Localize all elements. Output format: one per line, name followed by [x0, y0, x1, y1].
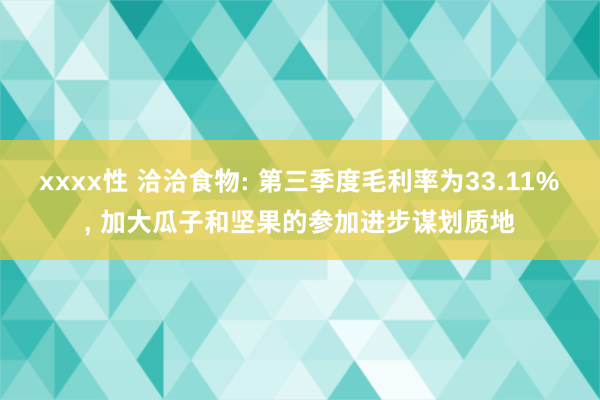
title line 1: xxxx性 洽洽食物: 第三季度毛利率为33.11% [39, 166, 561, 196]
title line 2: , 加大瓜子和坚果的参加进步谋划质地 [84, 207, 516, 237]
translucent yellow title band [0, 140, 600, 260]
title [39, 166, 561, 237]
